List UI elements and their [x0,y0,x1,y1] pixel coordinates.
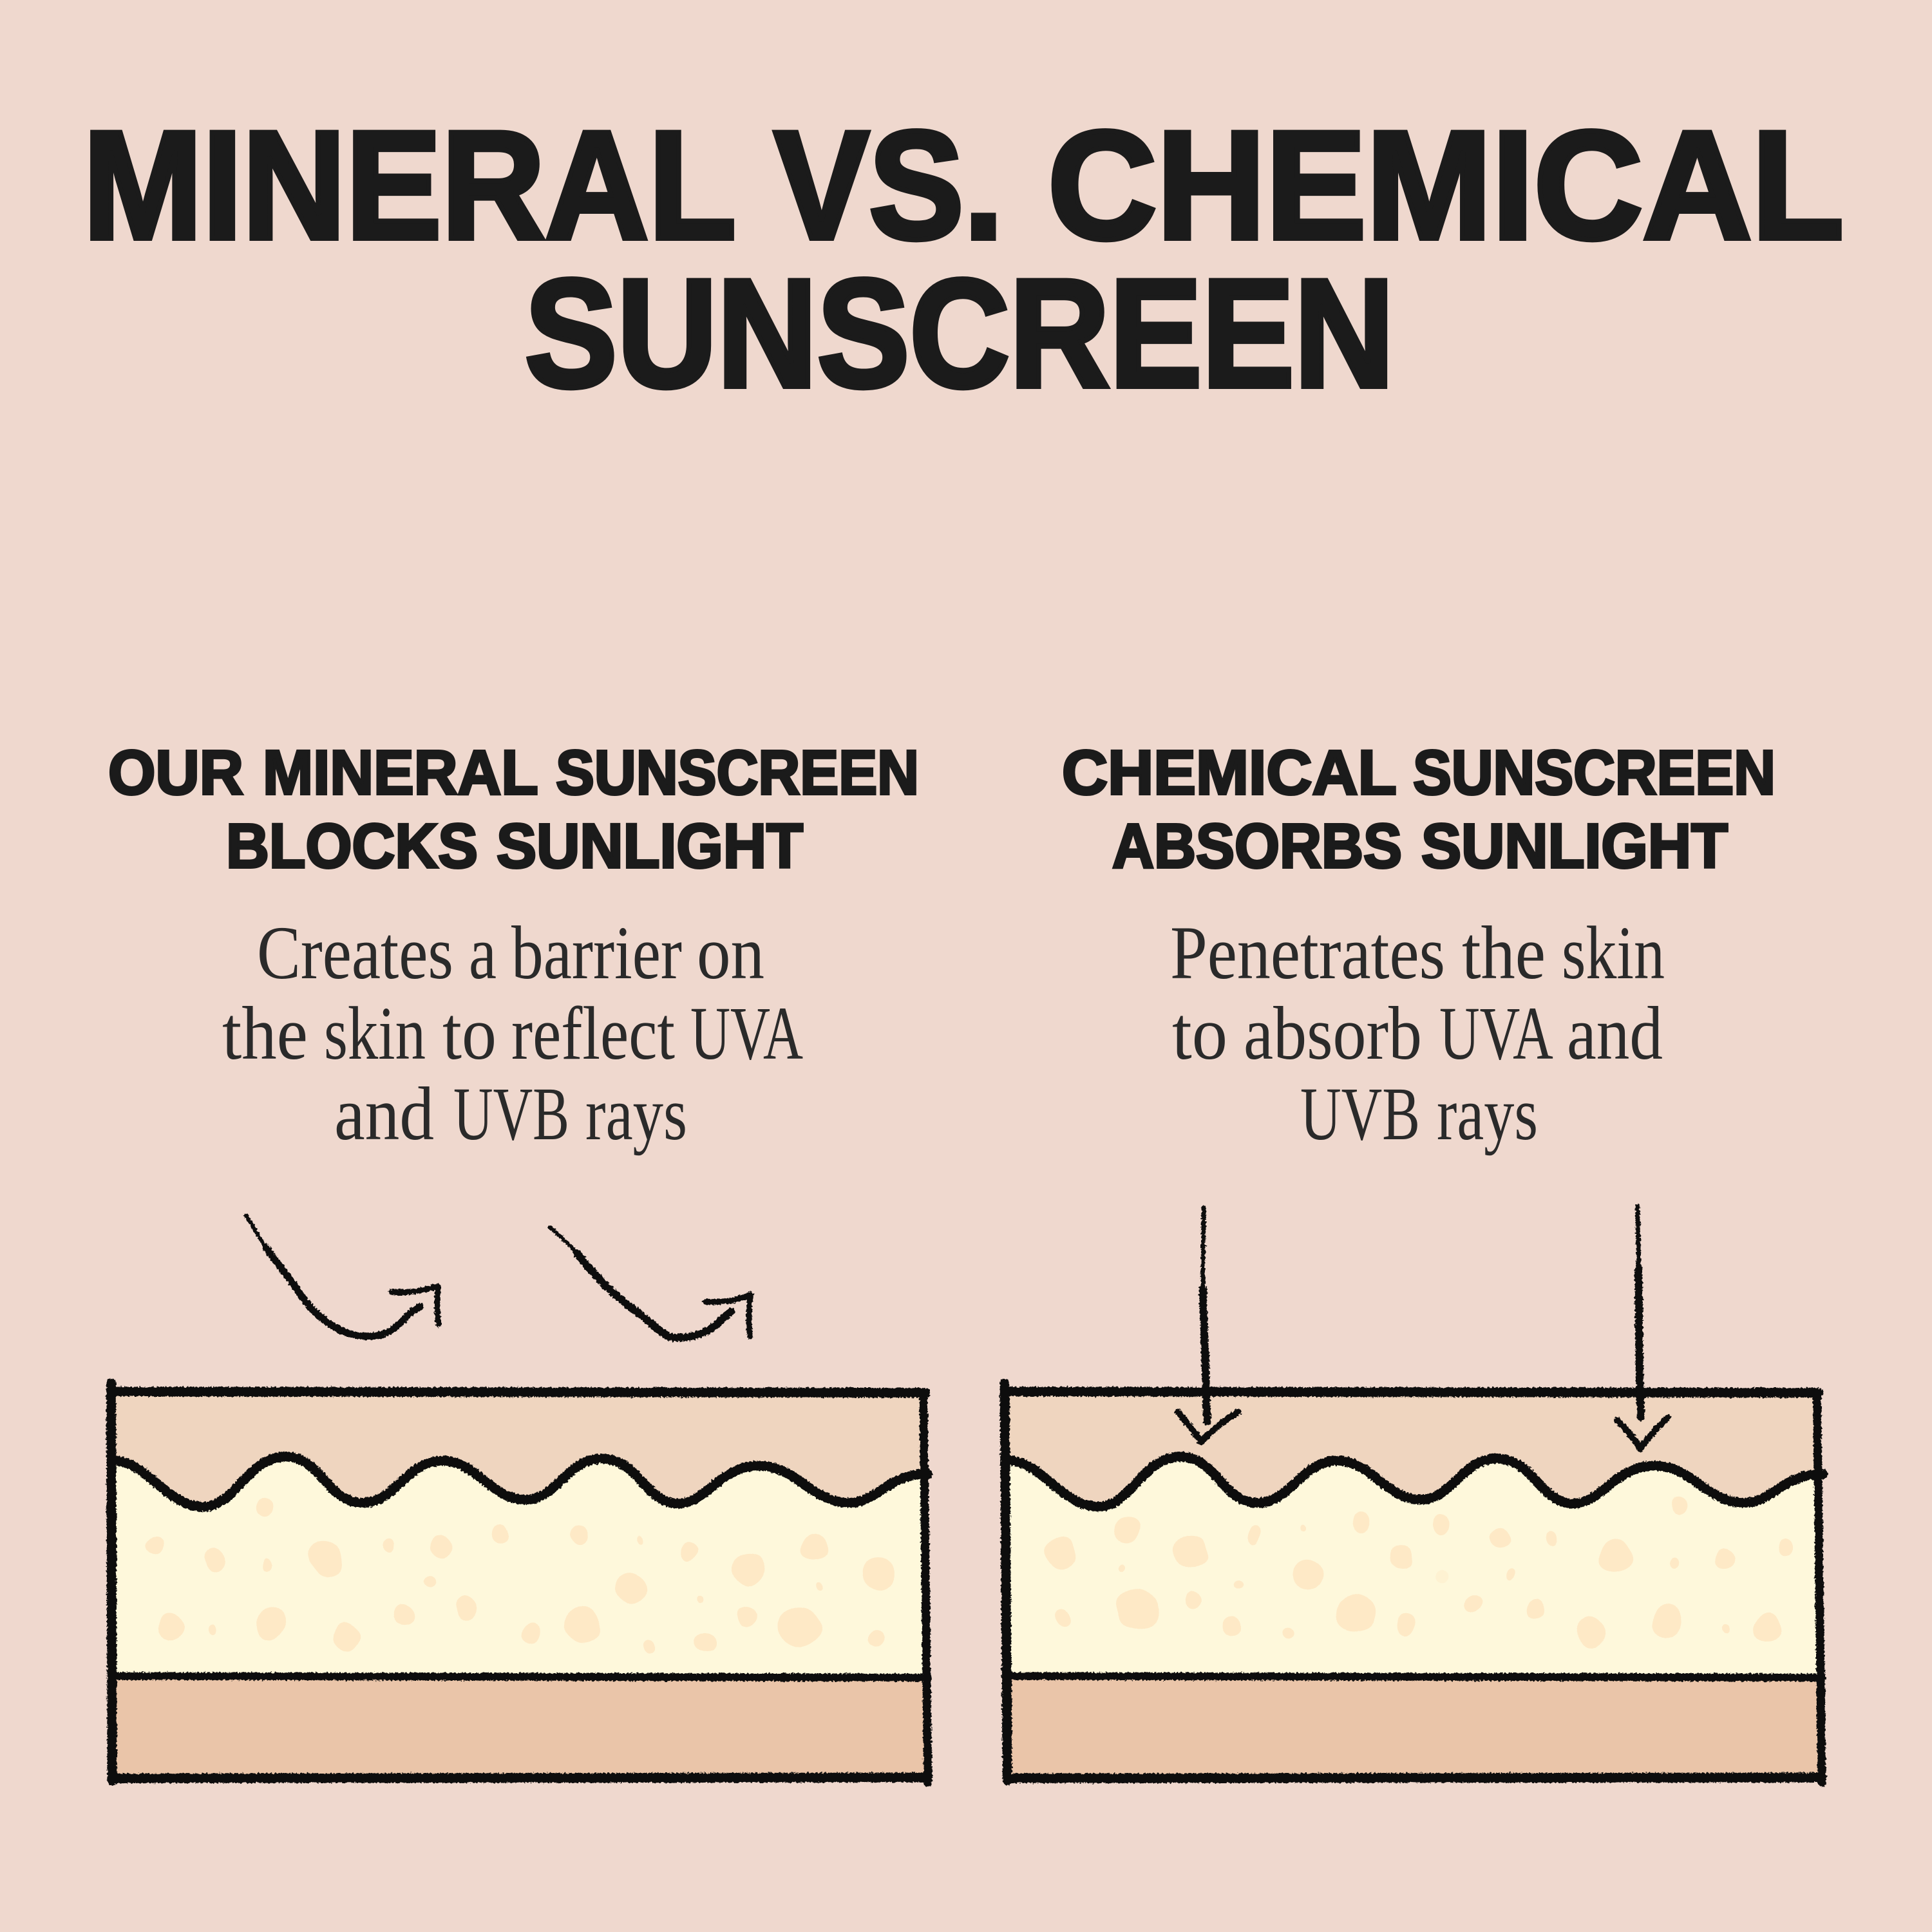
skin fills [1006,1392,1821,1778]
description: penetrates the skin: skin [1562,911,1665,995]
skin fills [111,1392,925,1778]
fat cells [1046,1496,1793,1648]
description: penetrates the skin: rays [1437,1072,1538,1156]
description: creates a barrier: skin [324,991,426,1075]
description: creates a barrier [222,911,803,1156]
description: penetrates the skin [1170,911,1665,1156]
description: creates a barrier: Creates [257,911,453,995]
heading: chemical sunscreen absorbs sunlight: ABSORBS [1112,811,1402,881]
description: creates a barrier: a [469,911,497,995]
description: creates a barrier: UVB [453,1072,569,1156]
heading: chemical sunscreen absorbs sunlight: SUNSCREEN [1413,737,1776,808]
heading: our mineral sunscreen blocks sunlight: SUNLIGHT [497,811,803,881]
description: creates a barrier: the [222,991,308,1075]
description: penetrates the skin: Penetrates [1170,911,1445,995]
title: CHEMICAL [1048,99,1844,271]
arrow: absorbed ray one [1178,1208,1238,1442]
description: penetrates the skin: absorb [1244,991,1422,1075]
panel: mineral sunscreen text [108,737,919,1156]
diagram: chemical skin layers [1005,1383,1823,1783]
heading: our mineral sunscreen blocks sunlight: BLOCKS [226,811,478,881]
description: creates a barrier: to [442,991,497,1075]
description: penetrates the skin: UVA [1439,991,1553,1075]
heading: our mineral sunscreen blocks sunlight: OUR [108,737,243,808]
arrow: reflected ray two [550,1227,751,1338]
description: creates a barrier: rays [585,1072,687,1156]
heading: chemical sunscreen absorbs sunlight: CHEMICAL [1062,737,1396,808]
heading: chemical sunscreen absorbs sunlight [1062,737,1776,881]
description: creates a barrier: reflect [511,991,675,1075]
diagram: mineral skin layers [111,1383,928,1783]
arrow: reflected ray one [246,1216,439,1336]
title: VS. [774,99,1003,271]
arrow: absorbed ray two [1617,1206,1668,1449]
heading: our mineral sunscreen blocks sunlight: MINERAL [263,737,537,808]
heading: our mineral sunscreen blocks sunlight: SUNSCREEN [556,737,919,808]
description: creates a barrier: on [697,911,764,995]
description: penetrates the skin: and [1567,991,1663,1075]
description: creates a barrier: and [334,1072,434,1156]
frame and skin line [1005,1383,1823,1783]
title: MINERAL [83,99,734,271]
description: creates a barrier: barrier [511,911,682,995]
description: creates a barrier: UVA [690,991,803,1075]
title [83,99,1844,419]
description: penetrates the skin: the [1462,911,1546,995]
heading: our mineral sunscreen blocks sunlight [108,737,919,881]
description: penetrates the skin: to [1172,991,1227,1075]
fat cells [147,1497,895,1653]
description: penetrates the skin: UVB [1300,1072,1420,1156]
heading: chemical sunscreen absorbs sunlight: SUNLIGHT [1421,811,1728,881]
panel: chemical sunscreen text [1062,737,1776,1156]
frame and skin line [111,1383,928,1783]
title: SUNSCREEN [525,247,1394,419]
